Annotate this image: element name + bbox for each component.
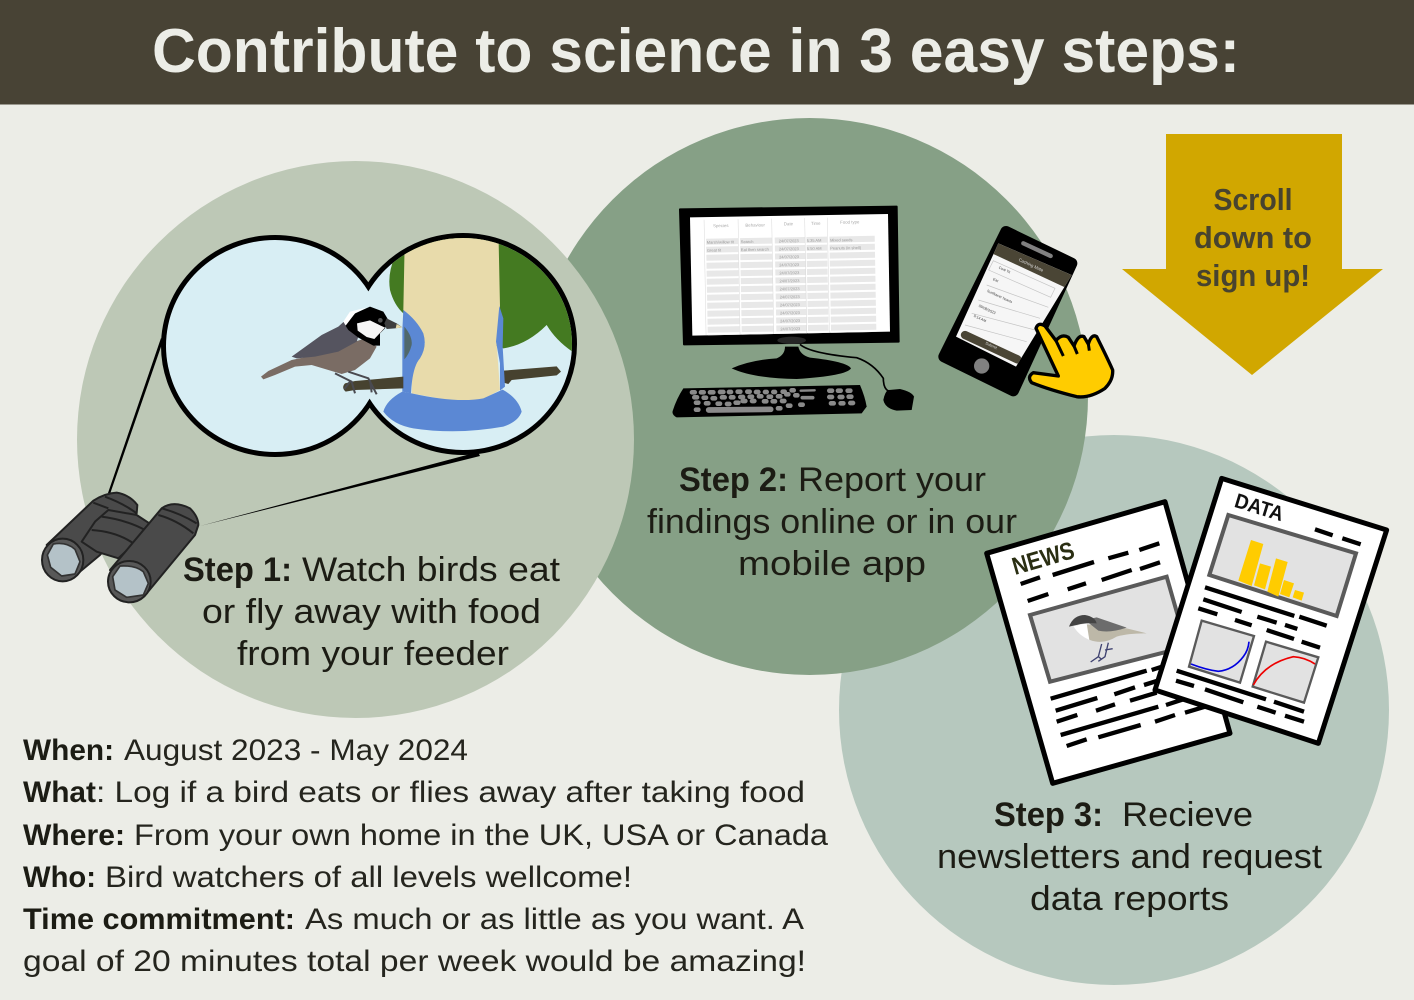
data entry table: 24/07/2023 [780,302,801,307]
text: step 3: Recieve [1122,796,1253,834]
feeder tube [403,227,500,402]
text: step 3: Step 3: [994,796,1103,834]
branch right [503,366,561,384]
data entry table: 5:50 AM [807,246,822,251]
data entry table: 24/07/2023 [779,246,800,251]
data entry table: 24/07/2023 [780,310,801,315]
keyboard [672,385,867,417]
binocular view illustration [161,233,577,457]
text block: project details: goal of 20 minutes total per week would be amazing! [23,945,806,978]
icon: phone with tapping hand: Sunflower hearts [986,289,1013,304]
data entry table: Time [811,221,821,226]
phone body [944,232,1072,391]
text block: project details [23,734,828,978]
text: step 1: from your feeder [237,635,509,673]
text: step 1: Watch birds eat [302,551,561,589]
data entry table: Great tit [707,247,722,253]
data entry table: Species [713,223,729,228]
icon: coal tit bird [261,307,403,394]
home button [974,358,989,374]
text block: project details: What [23,776,96,809]
text: step 1: Step 1: [183,551,292,589]
bridge [82,510,149,558]
text block: project details: : Log if a bird eats or flies away after taking food [96,776,805,809]
icon: phone with tapping hand: Caching Mate [1018,257,1045,273]
title: Contribute to science in 3 easy steps: [152,17,1240,86]
text: step 2: mobile app [738,545,926,583]
data entry table: Date [784,221,794,226]
data entry table: 24/07/2023 [779,254,800,259]
line chart: red [1253,642,1318,703]
text block: project details: Bird watchers of all levels wellcome! [105,861,632,894]
text: step 1 [183,551,561,673]
callout: scroll down arrow [1122,134,1383,375]
text: step 3: newsletters and request [937,838,1323,876]
feeder port and tray [383,306,522,431]
text block: project details: When: [23,734,114,767]
right barrel [110,504,198,593]
data entry table: Behaviour [745,222,765,228]
text block: project details: August 2023 - May 2024 [124,734,468,767]
text: step 3 [937,796,1323,918]
speaker [1023,243,1051,256]
data entry table: Search [741,239,753,244]
newsletter bird [1069,615,1147,662]
icon: newsletter page [987,502,1230,783]
panel: step 2 circle [531,118,1088,675]
text: step 2: findings online or in our [647,503,1017,541]
data entry table: 24/07/2023 [779,238,800,243]
data entry table: Food type [840,219,860,225]
sight lines from binoculars to view [108,338,480,526]
icon: phone with tapping hand [944,232,1113,397]
text: step 2: Step 2: [679,461,788,499]
text block: project details: As much or as little as you want. A [305,903,804,936]
callout: scroll down arrow: sign up! [1196,258,1310,293]
data entry table: 24/07/2023 [779,278,800,283]
data entry table: 24/07/2023 [779,262,800,267]
text: step 2: Report your [798,461,986,499]
icon: binoculars [42,493,198,602]
text block: project details: Who: [23,861,96,894]
monitor [680,207,899,344]
icon: newsletter page: NEWS [1009,537,1078,581]
data entry table: 24/07/2023 [779,270,800,275]
data entry table: 24/07/2023 [780,318,801,323]
icon: phone with tapping hand: Eat [992,277,999,283]
line chart: blue [1189,621,1254,683]
panel: step 1 circle [77,161,634,718]
header banner [0,0,1414,104]
bar chart [1209,515,1356,616]
data entry table: Peanuts (in shell) [830,245,862,251]
data entry table: 24/07/2023 [780,326,801,331]
icon: phone with tapping hand: Submit [985,340,999,351]
text block: project details: From your own home in the UK, USA or Canada [134,819,828,852]
data entry table: Marsh/willow tit [707,239,735,245]
foliage [389,238,572,352]
icon: desktop computer [672,207,914,417]
left barrel [47,493,137,572]
text: step 1: or fly away with food [202,593,541,631]
stand [732,347,851,379]
panel: step 3 circle [839,435,1389,985]
data entry table: Eat then search [741,247,769,252]
mouse [883,389,914,411]
text block: project details: Where: [23,819,125,852]
data entry table: Mixed seeds [830,237,853,243]
text block: project details: Time commitment: [23,903,295,936]
icon: phone with tapping hand: 9:14 AM [973,314,987,323]
icon: phone with tapping hand: 09/08/2023 [978,304,996,315]
icon: phone with tapping hand: Coal Tit [998,266,1011,274]
callout: scroll down arrow: down to [1194,220,1312,255]
data entry table [704,217,863,345]
data entry table: 24/07/2023 [780,294,801,299]
data entry table: 24/07/2023 [780,286,800,291]
text: step 2 [647,461,1017,583]
text: step 3: data reports [1030,880,1229,918]
icon: data report page: DATA [1232,489,1286,526]
hand [1030,324,1113,397]
data entry table: 5:35 AM [807,238,821,243]
icon: data report page [1155,478,1387,743]
cable [800,344,888,391]
callout: scroll down arrow: Scroll [1214,182,1292,217]
